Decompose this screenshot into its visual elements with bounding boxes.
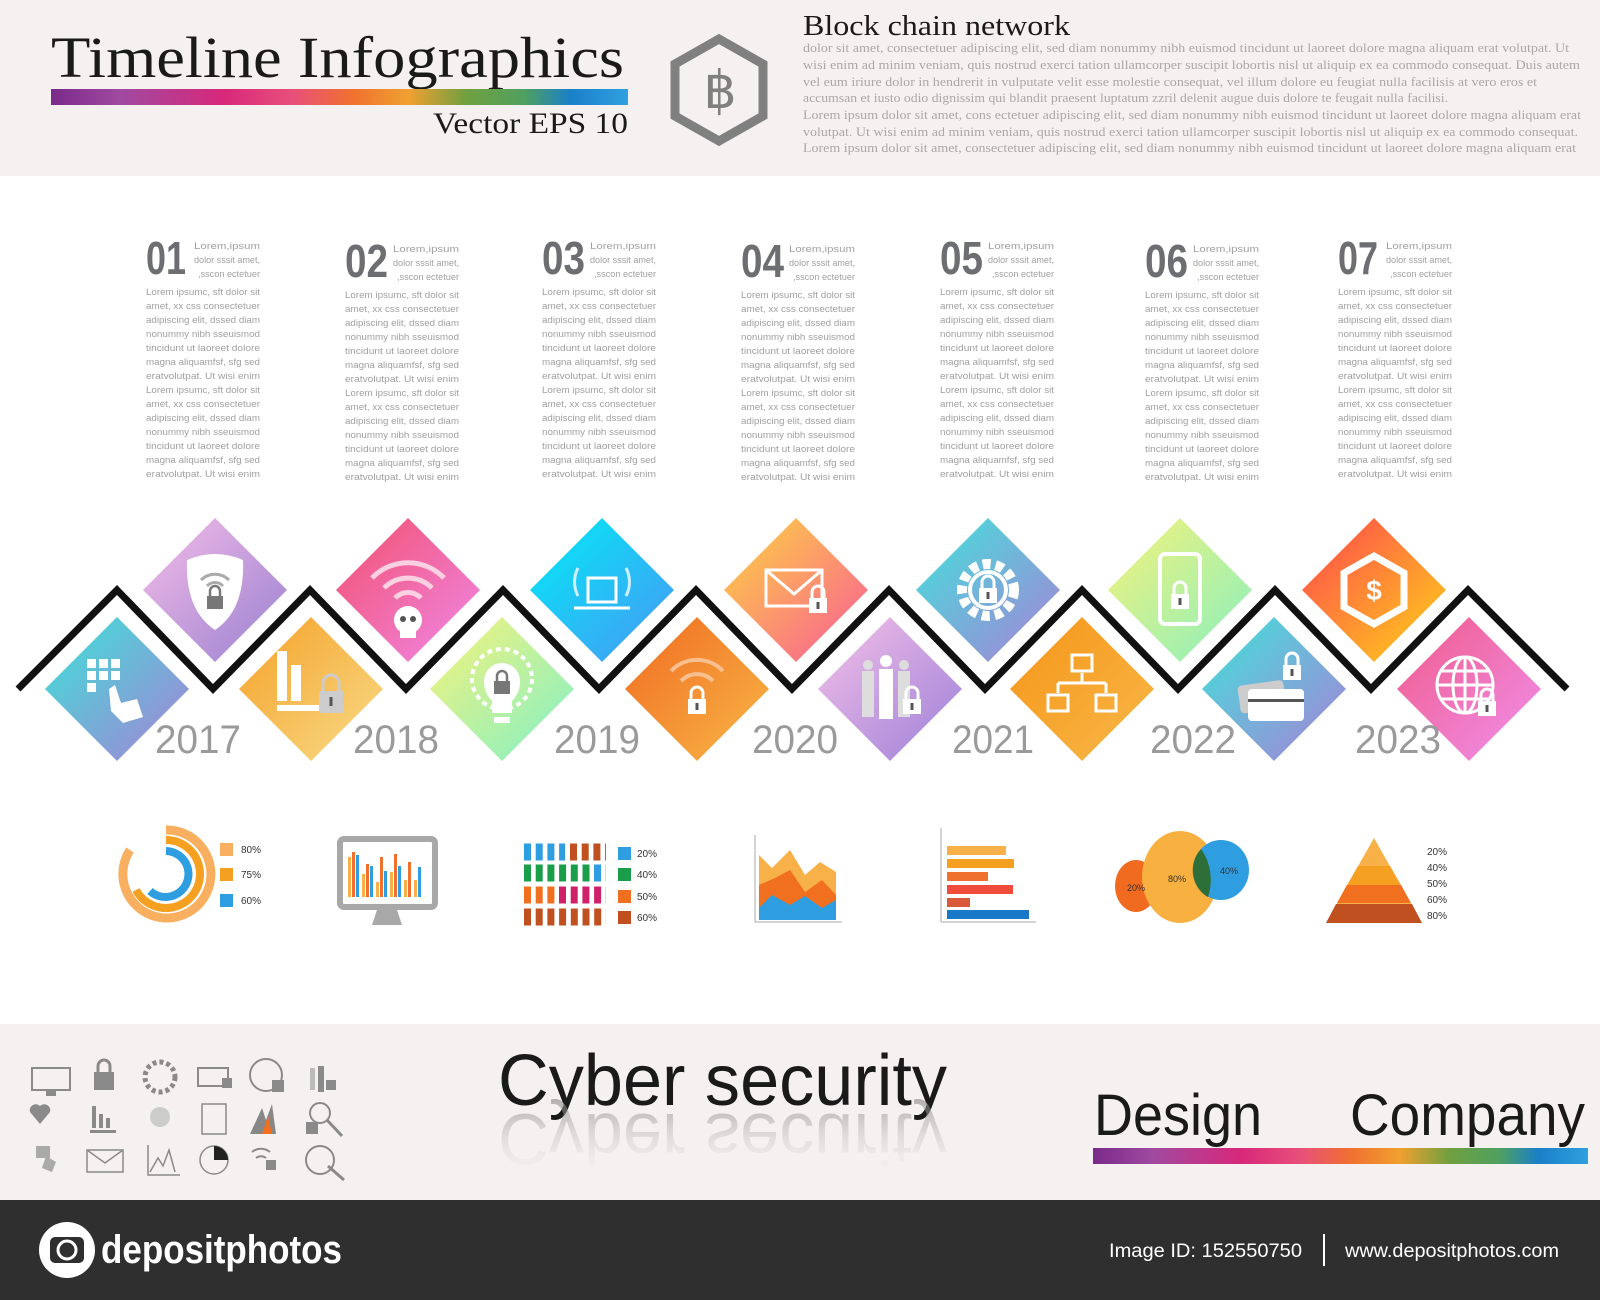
column 05: tincidunt ut laoreet dolore bbox=[940, 441, 1054, 452]
column 06: eratvolutpat. Ut wisi enim bbox=[1145, 472, 1259, 483]
column 07: eratvolutpat. Ut wisi enim bbox=[1338, 469, 1452, 480]
header band bbox=[0, 0, 1600, 176]
column 03: tincidunt ut laoreet dolore bbox=[542, 441, 656, 452]
column 02: Lorem ipsumc, sft dolor sit bbox=[345, 388, 459, 399]
column 07: nonummy nibh sseuismod bbox=[1338, 329, 1452, 340]
column 03: tincidunt ut laoreet dolore bbox=[542, 343, 656, 354]
column 01: amet, xx css consectetuer bbox=[146, 399, 260, 410]
chart: radial donut: 75% bbox=[241, 870, 261, 881]
column 04: magna aliquamfsf, sfg sed bbox=[741, 360, 855, 371]
year labels: 2018 bbox=[353, 718, 439, 762]
column 05: adipiscing elit, dssed diam bbox=[940, 315, 1054, 326]
column 04: Lorem ipsumc, sft dolor sit bbox=[741, 290, 855, 301]
column 02: nonummy nibh sseuismod bbox=[345, 430, 459, 441]
chart: pyramid: 60% bbox=[1427, 895, 1447, 906]
title: Timeline Infographics bbox=[51, 25, 624, 90]
column 03: adipiscing elit, dssed diam bbox=[542, 315, 656, 326]
diamond: lower 3 bulb bbox=[430, 617, 574, 761]
column 01: tincidunt ut laoreet dolore bbox=[146, 441, 260, 452]
chart: monitor bar chart bbox=[340, 839, 435, 925]
column 07: Lorem ipsumc, sft dolor sit bbox=[1338, 287, 1452, 298]
column 03 bbox=[542, 232, 656, 480]
text block: block chain network: Lorem ipsum dolor sit amet, cons ectetuer adipiscing elit, sed diam nonummy nibh euismod tincidunt ut laoreet dolore magna aliquam erat bbox=[803, 107, 1581, 122]
column 04: ,sscon ectetuer bbox=[793, 272, 855, 283]
column 03: 03 bbox=[542, 232, 585, 284]
column 02 bbox=[345, 235, 459, 483]
chart: people pictogram: 20% bbox=[637, 849, 657, 860]
column 01: magna aliquamfsf, sfg sed bbox=[146, 357, 260, 368]
text: design company: Design bbox=[1094, 1083, 1262, 1148]
column 06: amet, xx css consectetuer bbox=[1145, 402, 1259, 413]
column 06: tincidunt ut laoreet dolore bbox=[1145, 346, 1259, 357]
column 01: Lorem,ipsum bbox=[194, 241, 260, 252]
column 06: adipiscing elit, dssed diam bbox=[1145, 318, 1259, 329]
column 07: magna aliquamfsf, sfg sed bbox=[1338, 357, 1452, 368]
chart: people pictogram: 40% bbox=[637, 870, 657, 881]
column 07: magna aliquamfsf, sfg sed bbox=[1338, 455, 1452, 466]
diamond: lower 1 keypad bbox=[45, 617, 189, 761]
diamond: upper 7 dollar hex: $ bbox=[1366, 575, 1382, 606]
footer info bbox=[1109, 1234, 1559, 1266]
column 05: magna aliquamfsf, sfg sed bbox=[940, 357, 1054, 368]
column 04: tincidunt ut laoreet dolore bbox=[741, 444, 855, 455]
column 01 bbox=[146, 232, 260, 480]
column 05: eratvolutpat. Ut wisi enim bbox=[940, 371, 1054, 382]
column 03: amet, xx css consectetuer bbox=[542, 399, 656, 410]
column 05: Lorem ipsumc, sft dolor sit bbox=[940, 385, 1054, 396]
column 01: magna aliquamfsf, sfg sed bbox=[146, 455, 260, 466]
column 06: dolor sssit amet, bbox=[1193, 258, 1259, 269]
chart: people pictogram bbox=[524, 847, 657, 924]
year labels: 2023 bbox=[1355, 718, 1441, 762]
headline: cyber security: Cyber security bbox=[498, 1041, 947, 1121]
column 01: nonummy nibh sseuismod bbox=[146, 427, 260, 438]
diamond: upper 7 dollar hex bbox=[1302, 518, 1446, 662]
column 01: ,sscon ectetuer bbox=[198, 269, 260, 280]
text block: block chain network: vel eum iriure dolor in hendrerit in vulputate velit esse molestie consequat, vel illum dolore eu feugiat nulla facilisis at vero eros et bbox=[803, 74, 1537, 89]
column 06: Lorem ipsumc, sft dolor sit bbox=[1145, 388, 1259, 399]
column 02: Lorem,ipsum bbox=[393, 244, 459, 255]
footer info: Image ID: 152550750 bbox=[1109, 1241, 1302, 1262]
column 04: 04 bbox=[741, 235, 784, 287]
column 05: adipiscing elit, dssed diam bbox=[940, 413, 1054, 424]
column 04: eratvolutpat. Ut wisi enim bbox=[741, 472, 855, 483]
column 03: magna aliquamfsf, sfg sed bbox=[542, 357, 656, 368]
column 01: tincidunt ut laoreet dolore bbox=[146, 343, 260, 354]
column 07: eratvolutpat. Ut wisi enim bbox=[1338, 371, 1452, 382]
text: design company bbox=[1093, 1083, 1588, 1164]
column 02: nonummy nibh sseuismod bbox=[345, 332, 459, 343]
icon: hexagon baht: ฿ bbox=[703, 63, 737, 120]
column 06 bbox=[1145, 235, 1259, 483]
chart: people pictogram: 60% bbox=[637, 913, 657, 924]
year labels: 2020 bbox=[752, 718, 838, 762]
column 02: adipiscing elit, dssed diam bbox=[345, 416, 459, 427]
column 02: 02 bbox=[345, 235, 388, 287]
title: Vector EPS 10 bbox=[433, 107, 628, 140]
column 04: nonummy nibh sseuismod bbox=[741, 430, 855, 441]
column 06: 06 bbox=[1145, 235, 1188, 287]
column 04: dolor sssit amet, bbox=[789, 258, 855, 269]
text columns bbox=[146, 232, 1452, 483]
column 01: adipiscing elit, dssed diam bbox=[146, 315, 260, 326]
column 02: eratvolutpat. Ut wisi enim bbox=[345, 472, 459, 483]
headline: cyber security bbox=[498, 1041, 947, 1178]
column 06: magna aliquamfsf, sfg sed bbox=[1145, 360, 1259, 371]
column 05: eratvolutpat. Ut wisi enim bbox=[940, 469, 1054, 480]
year labels: 2019 bbox=[554, 718, 640, 762]
column 05 bbox=[940, 232, 1054, 480]
column 07: amet, xx css consectetuer bbox=[1338, 399, 1452, 410]
column 04: nonummy nibh sseuismod bbox=[741, 332, 855, 343]
diamond: upper 1 shield bbox=[143, 518, 287, 662]
year labels: 2017 bbox=[155, 718, 241, 762]
footer info: www.depositphotos.com bbox=[1344, 1241, 1559, 1262]
column 07: adipiscing elit, dssed diam bbox=[1338, 315, 1452, 326]
column 06: ,sscon ectetuer bbox=[1197, 272, 1259, 283]
chart: pyramid: 40% bbox=[1427, 863, 1447, 874]
chart: horizontal bars bbox=[941, 828, 1036, 922]
column 06: adipiscing elit, dssed diam bbox=[1145, 416, 1259, 427]
column 04: amet, xx css consectetuer bbox=[741, 402, 855, 413]
column 03: dolor sssit amet, bbox=[590, 255, 656, 266]
text block: block chain network: Lorem ipsum dolor sit amet, consectetuer adipiscing elit, sed diam nonummy nibh euismod tincidunt ut laoreet dolore magna aliquam erat bbox=[803, 140, 1576, 155]
column 02: magna aliquamfsf, sfg sed bbox=[345, 360, 459, 371]
column 05: nonummy nibh sseuismod bbox=[940, 329, 1054, 340]
column 06: Lorem ipsumc, sft dolor sit bbox=[1145, 290, 1259, 301]
column 04 bbox=[741, 235, 855, 483]
column 03: ,sscon ectetuer bbox=[594, 269, 656, 280]
column 03: Lorem ipsumc, sft dolor sit bbox=[542, 385, 656, 396]
column 06: tincidunt ut laoreet dolore bbox=[1145, 444, 1259, 455]
text block: block chain network: volutpat. Ut wisi enim ad minim veniam, quis nostrud exerci tation ullamcorper suscipit lobortis nisl ut aliquip ex ea commodo consequat. bbox=[803, 124, 1578, 139]
column 01: nonummy nibh sseuismod bbox=[146, 329, 260, 340]
chart: venn circles: 40% bbox=[1220, 866, 1238, 876]
column 02: Lorem ipsumc, sft dolor sit bbox=[345, 290, 459, 301]
column 02: amet, xx css consectetuer bbox=[345, 402, 459, 413]
text block: block chain network: dolor sit amet, consectetuer adipiscing elit, sed diam nonummy nibh euismod tincidunt ut laoreet dolore magna aliquam erat volutpat. Ut bbox=[803, 40, 1569, 55]
column 05: tincidunt ut laoreet dolore bbox=[940, 343, 1054, 354]
column 02: magna aliquamfsf, sfg sed bbox=[345, 458, 459, 469]
bottom band bbox=[0, 1024, 1600, 1200]
column 01: Lorem ipsumc, sft dolor sit bbox=[146, 385, 260, 396]
column 07: adipiscing elit, dssed diam bbox=[1338, 413, 1452, 424]
title bbox=[51, 25, 628, 140]
column 03: Lorem,ipsum bbox=[590, 241, 656, 252]
column 07: nonummy nibh sseuismod bbox=[1338, 427, 1452, 438]
column 07: Lorem,ipsum bbox=[1386, 241, 1452, 252]
diamond: upper 2 skull bbox=[336, 518, 480, 662]
chart: radial donut: 60% bbox=[241, 896, 261, 907]
column 07: Lorem ipsumc, sft dolor sit bbox=[1338, 385, 1452, 396]
column 04: tincidunt ut laoreet dolore bbox=[741, 346, 855, 357]
column 01: eratvolutpat. Ut wisi enim bbox=[146, 469, 260, 480]
column 06: eratvolutpat. Ut wisi enim bbox=[1145, 374, 1259, 385]
diamond: lower 2 bars lock bbox=[239, 617, 383, 761]
column 01: adipiscing elit, dssed diam bbox=[146, 413, 260, 424]
chart: pyramid: 20% bbox=[1427, 847, 1447, 858]
diamond: lower 6 network bbox=[1010, 617, 1154, 761]
column 05: Lorem,ipsum bbox=[988, 241, 1054, 252]
logo: depositphotos bbox=[39, 1222, 342, 1278]
text block: block chain network: accumsan et iusto odio dignissim qui blandit praesent luptatum zzril delenit augue duis dolore te feugait nulla facilisi. bbox=[803, 90, 1448, 105]
diamond: lower 5 people bbox=[818, 617, 962, 761]
diamond: upper 6 phone lock bbox=[1108, 518, 1252, 662]
column 03: magna aliquamfsf, sfg sed bbox=[542, 455, 656, 466]
column 07: tincidunt ut laoreet dolore bbox=[1338, 441, 1452, 452]
diamond: upper 3 monitor bbox=[530, 518, 674, 662]
chart: people pictogram: 50% bbox=[637, 892, 657, 903]
chart: venn circles: 20% bbox=[1127, 883, 1145, 893]
diamond: upper 4 envelope bbox=[724, 518, 868, 662]
column 04: magna aliquamfsf, sfg sed bbox=[741, 458, 855, 469]
chart: pyramid: 50% bbox=[1427, 879, 1447, 890]
column 05: dolor sssit amet, bbox=[988, 255, 1054, 266]
column 07 bbox=[1338, 232, 1452, 480]
column 01: eratvolutpat. Ut wisi enim bbox=[146, 371, 260, 382]
column 03: eratvolutpat. Ut wisi enim bbox=[542, 469, 656, 480]
column 07: dolor sssit amet, bbox=[1386, 255, 1452, 266]
column 05: magna aliquamfsf, sfg sed bbox=[940, 455, 1054, 466]
footer dark band bbox=[0, 1200, 1600, 1300]
column 03: adipiscing elit, dssed diam bbox=[542, 413, 656, 424]
column 05: amet, xx css consectetuer bbox=[940, 399, 1054, 410]
diamond: upper 5 gear lock bbox=[916, 518, 1060, 662]
diamond: lower 7 card bbox=[1202, 617, 1346, 761]
column 03: nonummy nibh sseuismod bbox=[542, 427, 656, 438]
timeline: diamonds and zigzag bbox=[18, 518, 1567, 761]
chart: pyramid bbox=[1326, 838, 1447, 923]
chart: venn circles bbox=[1115, 831, 1249, 923]
column 02: amet, xx css consectetuer bbox=[345, 304, 459, 315]
icon grid bbox=[30, 1059, 344, 1180]
column 07: tincidunt ut laoreet dolore bbox=[1338, 343, 1452, 354]
column 04: Lorem,ipsum bbox=[789, 244, 855, 255]
text block: block chain network: wisi enim ad minim veniam, quis nostrud exerci tation ullamcorper suscipit lobortis nisl ut aliquip ex ea commodo consequat. Duis autem bbox=[803, 57, 1580, 72]
column 04: Lorem ipsumc, sft dolor sit bbox=[741, 388, 855, 399]
icon: hexagon baht bbox=[675, 39, 763, 141]
text block: block chain network bbox=[803, 10, 1581, 155]
column 06: amet, xx css consectetuer bbox=[1145, 304, 1259, 315]
text: design company: Company bbox=[1350, 1083, 1585, 1148]
zigzag line bbox=[18, 590, 1567, 689]
chart: venn circles: 80% bbox=[1168, 874, 1186, 884]
column 05: nonummy nibh sseuismod bbox=[940, 427, 1054, 438]
column 01: 01 bbox=[146, 232, 186, 284]
column 05: ,sscon ectetuer bbox=[992, 269, 1054, 280]
column 03: nonummy nibh sseuismod bbox=[542, 329, 656, 340]
column 01: dolor sssit amet, bbox=[194, 255, 260, 266]
column 06: nonummy nibh sseuismod bbox=[1145, 430, 1259, 441]
column 04: adipiscing elit, dssed diam bbox=[741, 318, 855, 329]
year labels: 2022 bbox=[1150, 718, 1236, 762]
chart: radial donut: 80% bbox=[241, 845, 261, 856]
column 04: eratvolutpat. Ut wisi enim bbox=[741, 374, 855, 385]
column 02: ,sscon ectetuer bbox=[397, 272, 459, 283]
column 07: 07 bbox=[1338, 232, 1378, 284]
diamond: lower 4 wifi lock bbox=[625, 617, 769, 761]
column 01: Lorem ipsumc, sft dolor sit bbox=[146, 287, 260, 298]
column 05: 05 bbox=[940, 232, 983, 284]
column 05: Lorem ipsumc, sft dolor sit bbox=[940, 287, 1054, 298]
column 04: adipiscing elit, dssed diam bbox=[741, 416, 855, 427]
column 05: amet, xx css consectetuer bbox=[940, 301, 1054, 312]
text block: block chain network: Block chain network bbox=[803, 10, 1071, 42]
column 02: adipiscing elit, dssed diam bbox=[345, 318, 459, 329]
year labels bbox=[155, 718, 1441, 762]
column 02: dolor sssit amet, bbox=[393, 258, 459, 269]
column 06: nonummy nibh sseuismod bbox=[1145, 332, 1259, 343]
column 01: amet, xx css consectetuer bbox=[146, 301, 260, 312]
column 06: Lorem,ipsum bbox=[1193, 244, 1259, 255]
chart: radial donut bbox=[123, 830, 261, 918]
column 07: amet, xx css consectetuer bbox=[1338, 301, 1452, 312]
chart: area chart bbox=[755, 835, 842, 922]
diamond: lower 8 globe bbox=[1397, 617, 1541, 761]
headline: cyber security: Cyber security bbox=[498, 1098, 947, 1178]
column 03: amet, xx css consectetuer bbox=[542, 301, 656, 312]
column 02: tincidunt ut laoreet dolore bbox=[345, 444, 459, 455]
column 02: eratvolutpat. Ut wisi enim bbox=[345, 374, 459, 385]
column 02: tincidunt ut laoreet dolore bbox=[345, 346, 459, 357]
column 06: magna aliquamfsf, sfg sed bbox=[1145, 458, 1259, 469]
chart: pyramid: 80% bbox=[1427, 911, 1447, 922]
column 03: Lorem ipsumc, sft dolor sit bbox=[542, 287, 656, 298]
year labels: 2021 bbox=[952, 718, 1034, 762]
logo: depositphotos: depositphotos bbox=[101, 1228, 342, 1272]
column 04: amet, xx css consectetuer bbox=[741, 304, 855, 315]
column 07: ,sscon ectetuer bbox=[1390, 269, 1452, 280]
column 03: eratvolutpat. Ut wisi enim bbox=[542, 371, 656, 382]
